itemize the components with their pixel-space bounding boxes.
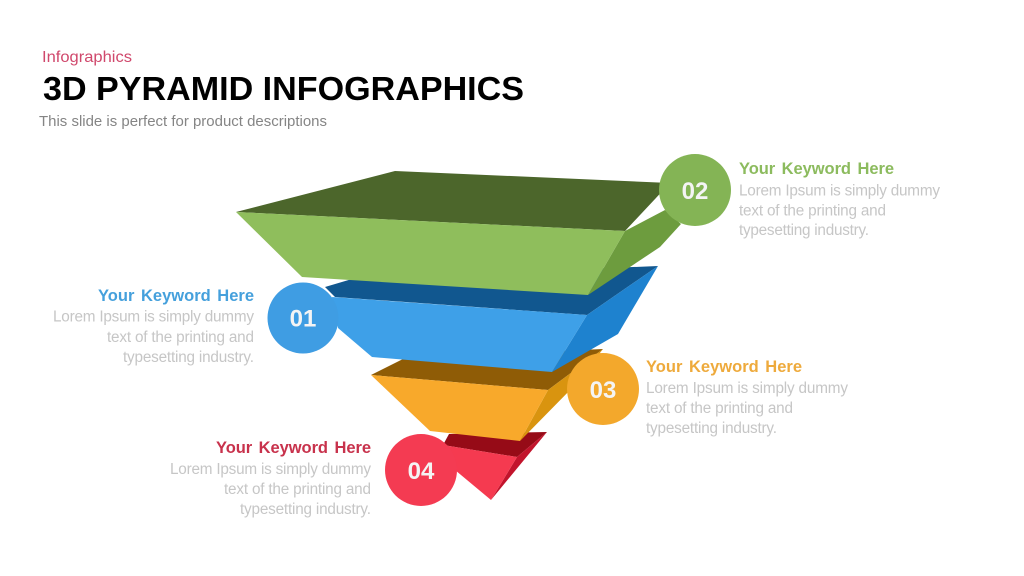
text block 02: Your Keyword Here — [739, 160, 894, 178]
text block 04: Lorem Ipsum is simply dummy — [170, 461, 371, 478]
pyramid layer 1: blue — [325, 266, 658, 372]
text block 04: typesetting industry. — [240, 501, 371, 518]
text block 01: Your Keyword Here — [98, 287, 254, 305]
eyebrow label: Infographics — [42, 49, 132, 66]
text block 01: Lorem Ipsum is simply dummy — [53, 308, 254, 326]
text block 03: Lorem Ipsum is simply dummy — [646, 380, 848, 397]
badge 01 — [268, 282, 338, 354]
badge 01: 01 — [290, 306, 316, 332]
pyramid layer 4: red — [443, 432, 547, 500]
text block 01: text of the printing and — [107, 329, 254, 346]
text block 03: Your Keyword Here — [646, 358, 802, 376]
text block 02: typesetting industry. — [739, 222, 869, 239]
text block 01: typesetting industry. — [123, 349, 254, 366]
pyramid layer 2: green — [236, 171, 681, 295]
badge 03: 03 — [590, 377, 616, 404]
badge 04: 04 — [408, 458, 435, 485]
text block 04: text of the printing and — [224, 481, 371, 498]
badge 02 — [659, 154, 731, 226]
text block 02: text of the printing and — [739, 202, 886, 220]
badge 03 — [567, 353, 639, 425]
text block 04 — [170, 439, 371, 518]
text block 04: Your Keyword Here — [216, 439, 371, 457]
text block 03: typesetting industry. — [646, 420, 777, 437]
pyramid layer 3: orange — [371, 349, 603, 441]
text block 03 — [646, 358, 848, 437]
text block 02 — [739, 160, 940, 239]
text block 02: Lorem Ipsum is simply dummy — [739, 182, 940, 200]
text block 03: text of the printing and — [646, 400, 793, 417]
badge 02: 02 — [682, 178, 708, 205]
subtitle: This slide is perfect for product descriptions — [39, 113, 327, 130]
badge 04 — [385, 434, 457, 506]
text block 01 — [53, 287, 254, 366]
title: 3D PYRAMID INFOGRAPHICS — [43, 71, 524, 108]
